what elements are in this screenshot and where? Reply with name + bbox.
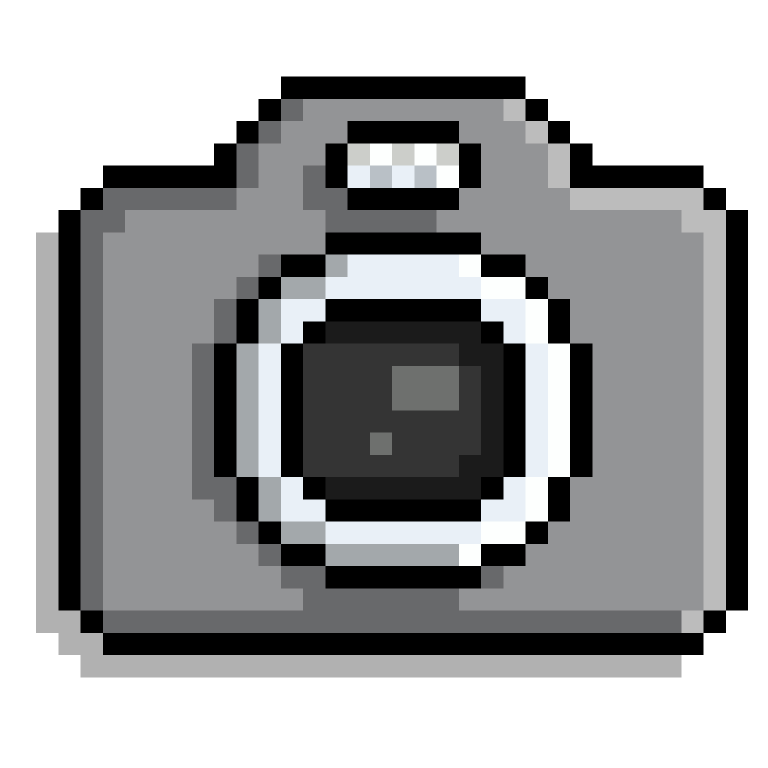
lens inner outline — [281, 299, 526, 522]
ring white highlight — [459, 255, 570, 566]
camera body — [58, 77, 748, 655]
flash frame — [325, 121, 481, 210]
flash cells: pale blue — [348, 166, 414, 188]
ring pale band — [258, 255, 548, 544]
drop shadow — [36, 232, 681, 677]
lens reflection small — [370, 433, 392, 455]
shadow around flash and lens — [192, 166, 503, 611]
body shaded edge — [80, 99, 681, 633]
lens ring — [214, 232, 592, 588]
body fill — [80, 99, 726, 633]
flash unit — [325, 121, 481, 210]
lens glass centre — [303, 344, 481, 477]
body highlight edge — [503, 99, 726, 633]
lens reflection large — [392, 366, 459, 410]
body outline — [58, 77, 748, 655]
flash cells: white — [370, 143, 459, 188]
lens dark rim — [303, 321, 503, 499]
lens glass — [281, 299, 526, 522]
flash cells: blue grey — [370, 166, 436, 188]
ring outer outline — [214, 232, 592, 588]
ring grey shade — [236, 255, 459, 566]
flash cells: grey — [348, 143, 459, 166]
